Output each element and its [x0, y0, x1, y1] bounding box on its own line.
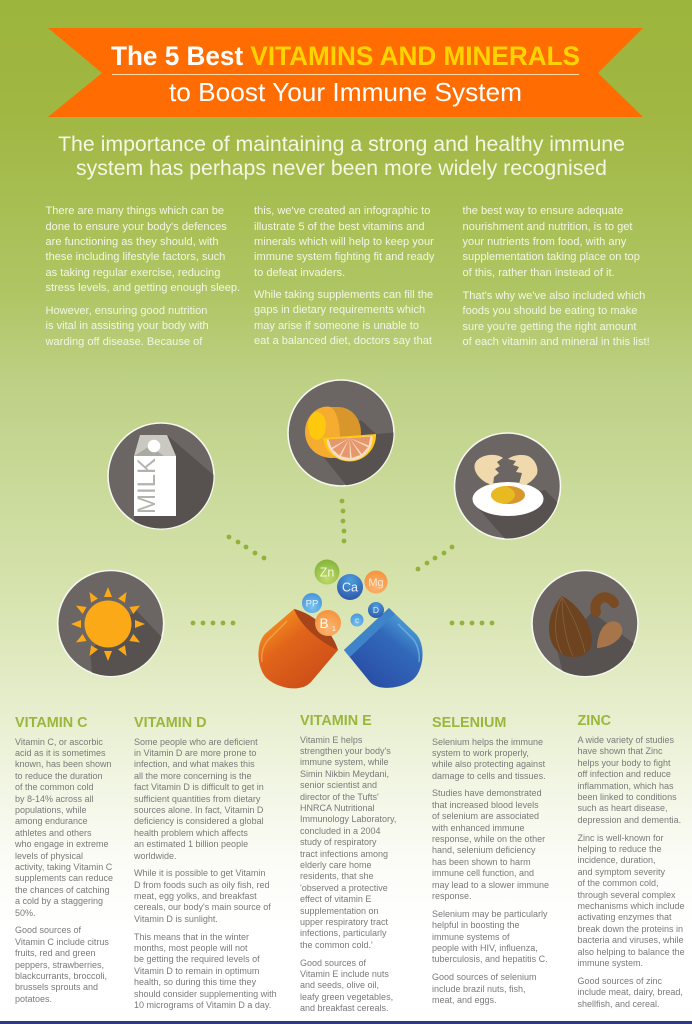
- panel: zinc: helping to reduce the: [578, 844, 662, 854]
- intro text column 2: illustrate 5 of the best vitamins and: [254, 221, 425, 233]
- title banner: [48, 28, 643, 117]
- icon: milk carton: MILK: [133, 458, 161, 514]
- panel: zinc: also helping to balance the: [578, 947, 685, 957]
- panel: vitamin E: infections, particularly: [300, 928, 387, 938]
- panel: vitamin C: peppers, strawberries,: [15, 960, 104, 970]
- panel: vitamin E: Vitamin E helps: [300, 734, 362, 744]
- bubble: B1: 1: [332, 626, 336, 633]
- bubble: B1: B: [319, 616, 329, 631]
- intro text column 3: of this, rather than instead of it.: [462, 267, 615, 279]
- intro text column 3: supplementation taking place on top: [462, 251, 640, 263]
- subtitle: [58, 132, 625, 180]
- panel: selenium: with enhanced immune: [432, 823, 525, 833]
- panel: zinc: off infection and reduce: [578, 769, 671, 779]
- panel: vitamin D: be getting the required levels of: [134, 954, 260, 964]
- heading: vitamin D: VITAMIN D: [134, 714, 206, 730]
- panel: zinc: been linked to conditions: [578, 792, 677, 802]
- panel: vitamin E: director of the Tufts': [300, 792, 379, 802]
- panel: vitamin E: leafy green vegetables,: [300, 992, 393, 1002]
- panel: vitamin E: Vitamin E include nuts: [300, 969, 389, 979]
- panel: selenium: [432, 714, 549, 1005]
- panel: selenium: Selenium may be particularly: [432, 909, 548, 919]
- intro text column 1: [46, 205, 240, 348]
- panel: vitamin C: the chances of catching: [15, 885, 110, 895]
- panel: vitamin E: effect of vitamin E: [300, 894, 371, 904]
- intro text column 3: foods you should be eating to make: [462, 305, 637, 317]
- panel: selenium: while also protecting against: [432, 759, 545, 769]
- panel: vitamin D: Some people who are deficient: [134, 736, 258, 746]
- panel: selenium: may lead to a slower immune: [432, 880, 549, 890]
- panel: selenium: Good sources of selenium: [432, 972, 537, 982]
- panel: selenium: that increased blood levels: [432, 800, 539, 810]
- panel: zinc: Zinc is well-known for: [578, 833, 664, 843]
- panel: vitamin D: This means that in the winter: [134, 932, 249, 942]
- panel: selenium: helpful in boosting the: [432, 920, 520, 930]
- panel: vitamin E: Good sources of: [300, 958, 366, 968]
- panel: vitamin C: Good sources of: [15, 925, 81, 935]
- footer rule: [0, 1021, 692, 1024]
- panel: vitamin D: D from foods such as oily fish, red: [134, 880, 270, 890]
- panel: vitamin C: among endurance: [15, 816, 88, 826]
- bubble: Mg: [364, 570, 388, 594]
- panel: vitamin E: concluded in a 2004: [300, 826, 381, 836]
- panel: vitamin E: senior scientist and: [300, 780, 377, 790]
- panel: vitamin E: tract infections among: [300, 849, 388, 859]
- intro text column 1: There are many things which can be: [46, 205, 224, 217]
- panel: vitamin C: of the common cold: [15, 782, 94, 792]
- panel: vitamin E: and seeds, olive oil,: [300, 980, 379, 990]
- heading: zinc: ZINC: [578, 713, 611, 729]
- panel: selenium: response, while on the other: [432, 834, 545, 844]
- panel: vitamin C: acid as it is sometimes: [15, 748, 106, 758]
- panel: selenium: immune cell function, and: [432, 868, 534, 878]
- panel: zinc: mechanisms which include: [578, 901, 685, 911]
- icon: sun: [58, 570, 170, 685]
- panel: vitamin D: sufficient quantities from dietary: [134, 794, 260, 804]
- panel: vitamin E: residents, that she: [300, 871, 374, 881]
- bubble: C: c: [355, 616, 359, 625]
- title line 2: to Boost Your Immune System: [169, 77, 522, 107]
- panel: selenium: Selenium helps the immune: [432, 736, 543, 746]
- panel: vitamin C: populations, while: [15, 805, 87, 815]
- panel: vitamin D: Vitamin D to remain in optimum: [134, 966, 259, 976]
- panel: vitamin D: should consider supplementing with: [134, 989, 277, 999]
- bubble: Zn: [314, 560, 340, 584]
- intro text column 3: your nutrients from food, with any: [462, 236, 626, 248]
- panel: vitamin E: the common cold.': [300, 940, 373, 950]
- panel: vitamin E: Simin Nikbin Meydani,: [300, 769, 389, 779]
- panel: vitamin D: sources alone. In fact, Vitamin D: [134, 805, 263, 815]
- panel: vitamin C: 50%.: [15, 908, 36, 918]
- panel: vitamin D: 10 micrograms of Vitamin D a day.: [134, 1000, 271, 1010]
- panel: zinc: include meat, dairy, bread,: [578, 987, 683, 997]
- panel: vitamin C: Vitamin C, or ascorbic: [15, 736, 103, 746]
- panel: zinc: depression and dementia.: [578, 815, 681, 825]
- intro text column 2: minerals which will help to keep your: [254, 236, 434, 248]
- bubble: B1: [315, 610, 341, 636]
- panel: vitamin D: health, so during this time they: [134, 977, 256, 987]
- panel: vitamin D: all the more concerning is the: [134, 771, 252, 781]
- panel: selenium: people with HIV, influenza,: [432, 943, 538, 953]
- capsule with vitamin bubbles: [258, 560, 423, 688]
- intro text column 2: immune system fighting fit and ready: [254, 251, 434, 263]
- panel: zinc: Good sources of zinc: [578, 976, 662, 986]
- panel: vitamin D: worldwide.: [134, 851, 177, 861]
- subtitle: The importance of maintaining a strong and healthy immune: [58, 132, 625, 156]
- panel: vitamin C: athletes and others: [15, 828, 92, 838]
- panel: vitamin E: elderly care home: [300, 860, 372, 870]
- panel: selenium: of selenium are associated: [432, 811, 539, 821]
- intro text column 1: stress levels, and getting enough sleep.: [46, 282, 240, 294]
- panel: vitamin C: potatoes.: [15, 994, 52, 1004]
- dotted connectors: [191, 499, 494, 625]
- panel: zinc: such as heart disease,: [578, 803, 668, 813]
- panel: selenium: include brazil nuts, fish,: [432, 984, 526, 994]
- panel: zinc: through several complex: [578, 890, 676, 900]
- icon: orange and slice: [288, 380, 400, 490]
- panel: zinc: A wide variety of studies: [578, 735, 674, 745]
- panel: selenium: has been shown to harm: [432, 857, 531, 867]
- intro text column 1: However, ensuring good nutrition: [46, 305, 207, 317]
- intro text column 2: gaps in dietary requirements which: [254, 304, 425, 316]
- intro text column 1: done to ensure your body's defences: [46, 221, 227, 233]
- panel: selenium: Studies have demonstrated: [432, 788, 542, 798]
- panel: selenium: hand, selenium deficiency: [432, 845, 536, 855]
- panel: zinc: break down the proteins in: [578, 924, 683, 934]
- panel: vitamin D: in Vitamin D are more prone to: [134, 748, 256, 758]
- infographic artwork: banner, subtitle, icons and capsule: [48, 28, 643, 688]
- panel: zinc: bacteria and viruses, while: [578, 935, 684, 945]
- panel: vitamin E: strengthen your body's: [300, 746, 391, 756]
- panel: vitamin D: infection, and what makes this: [134, 759, 255, 769]
- intro text column 3: of each vitamin and mineral in this list!: [462, 336, 650, 348]
- intro text column 2: While taking supplements can fill the: [254, 289, 433, 301]
- panel: vitamin C: Vitamin C include citrus: [15, 937, 109, 947]
- panel: vitamin C: levels of physical: [15, 851, 83, 861]
- panel: vitamin D: While it is possible to get Vitamin: [134, 868, 265, 878]
- panel: vitamin E: 'observed a protective: [300, 883, 388, 893]
- panel: selenium: system to work properly,: [432, 748, 529, 758]
- intro text column 3: nourishment and nutrition, is to get: [462, 221, 632, 233]
- panel: vitamin C: brussels sprouts and: [15, 982, 98, 992]
- panel: vitamin C: supplements can reduce: [15, 873, 113, 883]
- panel: vitamin D: fact Vitamin D is difficult to get in: [134, 782, 264, 792]
- panel: vitamin E: immune system, while: [300, 757, 389, 767]
- panel: vitamin D: Vitamin D is sunlight.: [134, 914, 218, 924]
- intro text column 1: these including lifestyle factors, such: [46, 251, 225, 263]
- blue capsule half: [344, 608, 423, 688]
- icon: milk carton: [108, 423, 216, 535]
- panel: vitamin E: study of respiratory: [300, 837, 377, 847]
- panel: zinc: shellfish, and cereal.: [578, 999, 660, 1009]
- heading: vitamin C: VITAMIN C: [15, 714, 87, 730]
- intro text column 3: [462, 205, 650, 348]
- panel: zinc: inflammation, which has: [578, 781, 674, 791]
- icon: cracked egg: [454, 433, 570, 540]
- bubble: D: D: [373, 605, 379, 615]
- panel: selenium: meat, and eggs.: [432, 995, 497, 1005]
- panel: zinc: have shown that Zinc: [578, 746, 663, 756]
- panel: vitamin D: health problem which affects: [134, 828, 248, 838]
- panel: vitamin E: [300, 712, 396, 1013]
- panel: selenium: response.: [432, 891, 472, 901]
- intro text column 1: is vital in assisting your body with: [46, 320, 209, 332]
- panel: zinc: helps your body to fight: [578, 758, 671, 768]
- panel: vitamin C: known, has been shown: [15, 759, 112, 769]
- subtitle: system has perhaps never been more widely recognised: [76, 156, 607, 180]
- intro text column 3: sure you're getting the right amount: [462, 321, 636, 333]
- panel: vitamin E: and breakfast cereals.: [300, 1003, 389, 1013]
- panel: zinc: [578, 713, 685, 1009]
- bubble: Ca: Ca: [342, 580, 358, 594]
- bubble: D: [368, 602, 384, 618]
- panel: zinc: of the common cold,: [578, 878, 659, 888]
- intro text column 2: this, we've created an infographic to: [254, 205, 430, 217]
- panel: vitamin C: a cold by a staggering: [15, 896, 103, 906]
- panel: zinc: incidence, duration,: [578, 855, 656, 865]
- panel: zinc: activating enzymes that: [578, 912, 672, 922]
- panel: vitamin D: [134, 714, 277, 1010]
- panel: zinc: immune system.: [578, 958, 643, 968]
- panel: vitamin C: activity, taking Vitamin C: [15, 862, 112, 872]
- title line 1: The 5 Best VITAMINS AND MINERALS: [111, 41, 580, 71]
- heading: vitamin E: VITAMIN E: [300, 712, 372, 728]
- panel: vitamin E: HNRCA Nutritional: [300, 803, 375, 813]
- panel: vitamin C: who engage in extreme: [15, 839, 109, 849]
- intro text column 2: eat a balanced diet, doctors say that: [254, 335, 432, 347]
- intro text column 2: [254, 205, 434, 347]
- bubble: Mg: Mg: [368, 577, 384, 589]
- intro text column 2: to defeat invaders.: [254, 267, 345, 279]
- icon: nuts: [532, 570, 645, 685]
- panel: vitamin E: supplementation on: [300, 906, 379, 916]
- panel: vitamin C: by 8-14% across all: [15, 794, 94, 804]
- panel: vitamin D: months, most people will not: [134, 943, 248, 953]
- panel: vitamin C: fruits, red and green: [15, 948, 96, 958]
- bubble: PP: PP: [306, 598, 318, 610]
- panel: vitamin D: deficiency is considered a global: [134, 816, 264, 826]
- panel: vitamin D: meat, egg yolks, and breakfast: [134, 891, 257, 901]
- intro text column 1: as taking regular exercise, reducing: [46, 267, 220, 279]
- intro text column 3: the best way to ensure adequate: [462, 205, 623, 217]
- panel: selenium: tuberculosis, and hepatitis C.: [432, 954, 548, 964]
- panel: vitamin D: an estimated 1 billion people: [134, 839, 248, 849]
- intro text column 2: may arise if someone is unable to: [254, 320, 419, 332]
- heading: selenium: SELENIUM: [432, 714, 506, 730]
- panel: selenium: damage to cells and tissues.: [432, 771, 546, 781]
- panel: vitamin C: to reduce the duration: [15, 771, 103, 781]
- intro text column 1: warding off disease. Because of: [46, 336, 202, 348]
- panel: vitamin E: upper respiratory tract: [300, 917, 388, 927]
- bubble: Ca: [337, 574, 363, 600]
- orange capsule half: [258, 609, 338, 688]
- panel: selenium: immune systems of: [432, 932, 510, 942]
- panel: vitamin C: blackcurrants, broccoli,: [15, 971, 107, 981]
- bubble: C: [350, 614, 364, 626]
- intro text column 3: That's why we've also included which: [462, 290, 645, 302]
- panel: zinc: and symptom severity: [578, 867, 665, 877]
- intro text column 1: are functioning as they should, with: [46, 236, 219, 248]
- panel: vitamin E: Immunology Laboratory,: [300, 814, 396, 824]
- panel: vitamin C: [15, 714, 113, 1004]
- panel: vitamin D: cereals, our body's main source of: [134, 902, 271, 912]
- bubble: PP: [302, 593, 322, 613]
- bubble: Zn: Zn: [320, 566, 334, 580]
